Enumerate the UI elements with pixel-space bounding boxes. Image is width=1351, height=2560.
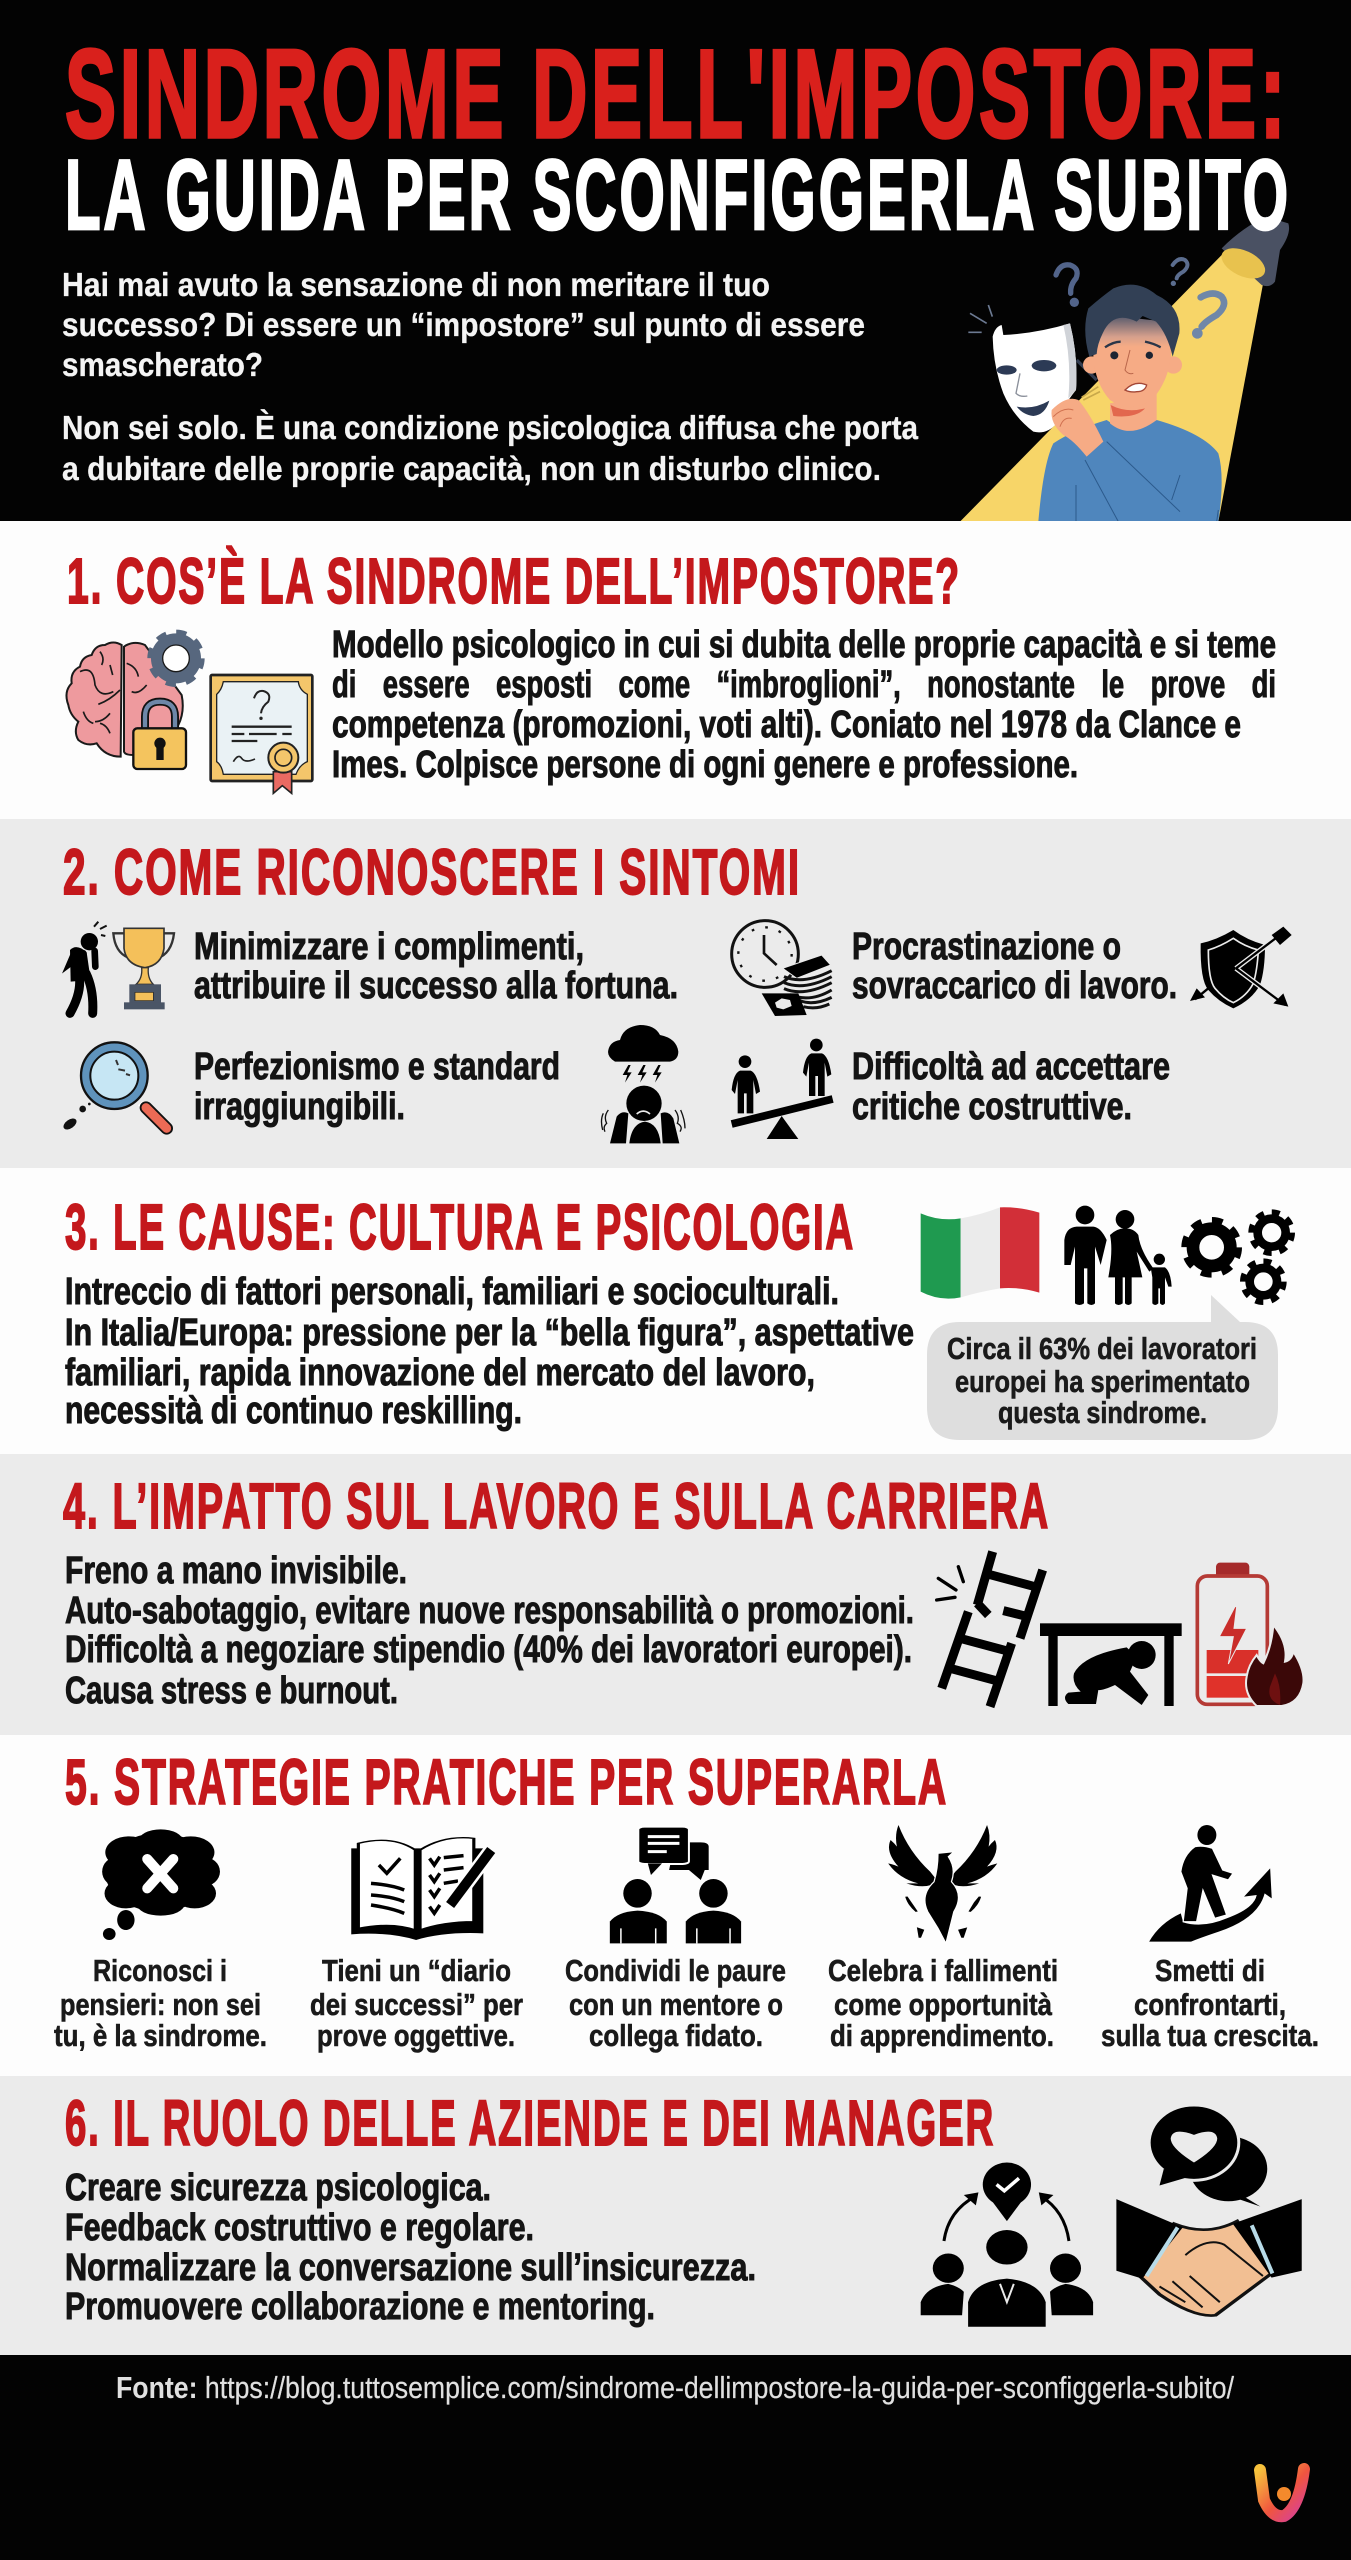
strategy captions: Smetti di (1155, 1953, 1265, 1988)
symptom texts: irraggiungibili. (194, 1086, 405, 1128)
strategy captions: tu, è la sindrome. (54, 2018, 267, 2053)
intro text: successo? Di essere un “impostore” sul punto di essere (62, 306, 865, 343)
icon: shield and deflected arrows (1190, 927, 1292, 1008)
strategy captions (54, 1953, 1319, 2053)
icon: open journal with checklist (351, 1838, 491, 1940)
panel: section 1 (0, 521, 1351, 819)
body text 3: Intreccio di fattori personali, familiari e socioculturali. (65, 1271, 839, 1313)
strategy captions: Condividi le paure (565, 1953, 786, 1988)
body text 6: Feedback costruttivo e regolare. (65, 2207, 534, 2249)
body text 6 (65, 2167, 756, 2328)
body text 3: familiari, rapida innovazione del mercato del lavoro, (65, 1352, 815, 1394)
callout: 63% statistic: Circa il 63% dei lavoratori (947, 1331, 1257, 1366)
strategy captions: di apprendimento. (830, 2018, 1054, 2053)
callout: 63% statistic (927, 1295, 1278, 1440)
icon: three gears (1186, 1213, 1292, 1302)
strategy captions: pensieri: non sei (60, 1987, 261, 2022)
body text 6: Normalizzare la conversazione sull’insicurezza. (65, 2247, 756, 2289)
strategy captions: collega fidato. (589, 2018, 763, 2053)
intro text: smascherato? (62, 346, 263, 383)
illustration: person with mask under spotlight (960, 217, 1289, 522)
body text 4: Causa stress e burnout. (65, 1670, 398, 1712)
intro text: Non sei solo. È una condizione psicologica diffusa che porta (62, 409, 919, 446)
icon: person hiding face (70, 922, 107, 1013)
icon: trophy (113, 928, 174, 1009)
icon: two people talking (610, 1827, 741, 1943)
symptom texts: critiche costruttive. (852, 1086, 1132, 1128)
icon: family (1064, 1206, 1172, 1305)
callout: 63% statistic: europei ha sperimentato (955, 1364, 1250, 1399)
heading 3: 3. LE CAUSE: CULTURA E PSICOLOGIA (65, 1191, 855, 1263)
symptom texts (194, 926, 1177, 1128)
panel: section 6 (0, 2076, 1351, 2355)
icon: broken ladder (937, 1552, 1043, 1707)
icon: seesaw with two people (732, 1039, 833, 1139)
symptom texts: sovraccarico di lavoro. (852, 965, 1177, 1007)
symptom texts: attribuire il successo alla fortuna. (194, 965, 678, 1007)
strategy captions: Celebra i fallimenti (828, 1953, 1058, 1988)
icon: person under storm cloud (601, 1025, 685, 1143)
body text 6: Promuovere collaborazione e mentoring. (65, 2286, 655, 2328)
strategy captions: confrontarti, (1134, 1987, 1286, 2022)
panel: footer (0, 2355, 1351, 2560)
logo (1260, 2469, 1304, 2516)
strategy captions: come opportunità (834, 1987, 1053, 2022)
body text 1 (332, 624, 1276, 786)
strategy captions: con un mentore o (569, 1987, 783, 2022)
panel: section 2 (0, 819, 1351, 1168)
intro text: Hai mai avuto la sensazione di non meritare il tuo (62, 266, 770, 303)
intro text: a dubitare delle proprie capacità, non un disturbo clinico. (62, 450, 881, 487)
body text 3: In Italia/Europa: pressione per la “bella figura”, aspettative (65, 1312, 914, 1354)
symptom texts: Procrastinazione o (852, 926, 1121, 968)
icon: clock and paper stack (732, 921, 832, 1016)
icon: person crawling under desk (1040, 1623, 1182, 1706)
symptom texts: Perfezionismo e standard (194, 1046, 560, 1088)
icon: italian flag (921, 1207, 1039, 1299)
strategy captions: Riconosci i (93, 1953, 227, 1988)
body text 3: necessità di continuo reskilling. (65, 1390, 522, 1432)
icon: person climbing arrow (1149, 1825, 1272, 1942)
body text 6: Creare sicurezza psicologica. (65, 2167, 491, 2209)
strategy captions: prove oggettive. (317, 2018, 515, 2053)
body text 4: Auto-sabotaggio, evitare nuove responsabilità o promozioni. (65, 1590, 914, 1632)
icon: burning battery (1197, 1563, 1304, 1706)
icon: magnifying glass (62, 1042, 167, 1132)
strategy captions: Tieni un “diario (322, 1953, 511, 1988)
icon: thought cloud with X (102, 1829, 220, 1940)
icon: handshake with heart bubbles (1116, 2105, 1302, 2316)
body text 4: Freno a mano invisibile. (65, 1550, 407, 1592)
body text 1: Imes. Colpisce persone di ogni genere e professione. (332, 744, 1078, 786)
body text 4: Difficoltà a negoziare stipendio (40% dei lavoratori europei). (65, 1629, 912, 1671)
strategy captions: dei successi” per (310, 1987, 523, 2022)
symptom texts: Difficoltà ad accettare (852, 1046, 1170, 1088)
panel: header (0, 0, 1351, 522)
panel: section 5 (0, 1735, 1351, 2076)
intro text (62, 266, 919, 487)
icon: certificate with question mark (211, 675, 312, 793)
symptom texts: Minimizzare i complimenti, (194, 926, 584, 968)
heading 2: 2. COME RICONOSCERE I SINTOMI (63, 836, 801, 908)
panel: section 4 (0, 1454, 1351, 1735)
icon: brain with gear and lock (66, 633, 201, 769)
body text 4 (65, 1550, 914, 1712)
body text 3 (65, 1271, 914, 1432)
callout: 63% statistic: questa sindrome. (998, 1395, 1207, 1430)
icon: manager with team (921, 2163, 1093, 2327)
panel: section 3 (0, 1168, 1351, 1454)
icon: phoenix (888, 1825, 997, 1943)
